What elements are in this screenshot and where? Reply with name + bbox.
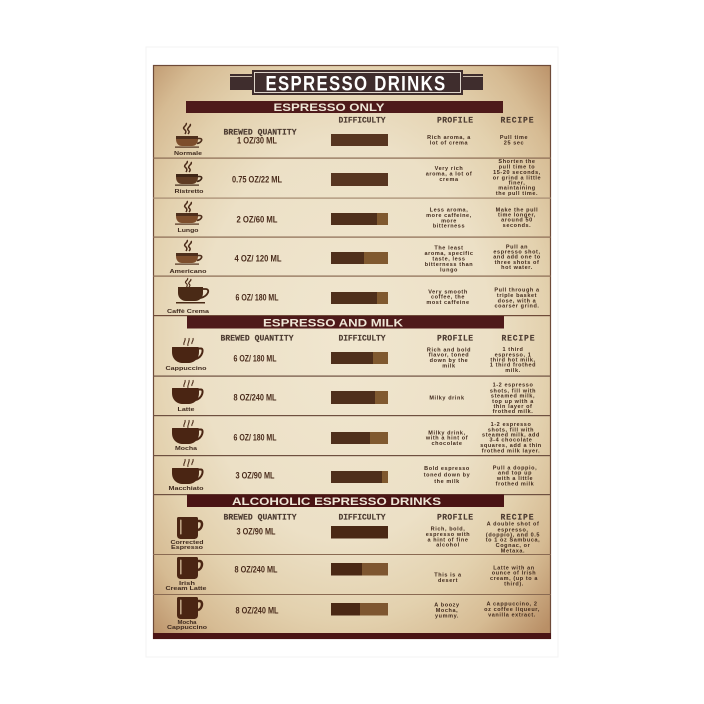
row: Corrected Espresso: Metaxa. (501, 548, 525, 554)
row: Mocha: shots, fill with (488, 427, 534, 433)
row: Americano: 4 OZ/ 120 ML (234, 254, 282, 264)
icon: cup (176, 278, 208, 304)
row: Lungo: around 50 (501, 218, 533, 224)
row: Caffè Crema (167, 278, 540, 315)
row: Normale: lot of crema (430, 140, 469, 146)
row: Ristretto: pull time to (499, 164, 535, 170)
row: Mocha Cappuccino: vanilla extract. (488, 612, 536, 618)
row: Mocha: Milky drink, (428, 430, 466, 436)
column headers (224, 116, 534, 138)
row: Macchiato: Pull a doppio, (493, 465, 537, 471)
outer card (146, 47, 558, 657)
row: Lungo: Less aroma, (430, 208, 468, 214)
row: Americano: and add one to (493, 255, 541, 261)
row: Cappuccino: down by the (430, 358, 468, 364)
row: Ristretto: Shorten the (498, 159, 536, 165)
row: Ristretto: 15-20 seconds, (493, 170, 541, 176)
row: Irish Cream Latte: This is a (434, 573, 462, 579)
row: Corrected Espresso: espresso with (426, 532, 470, 538)
row: Corrected Espresso: (doppio), and 0.5 (486, 532, 540, 538)
row: Caffè Crema: triple basket (497, 293, 537, 299)
section bar (187, 494, 504, 508)
row: Irish Cream Latte: cream, (up to a (490, 576, 538, 582)
title banner: ESPRESSO DRINKS (266, 73, 446, 96)
row: Ristretto: Very rich (435, 166, 463, 172)
row: Latte (172, 380, 536, 415)
icon: mug (177, 517, 202, 539)
row: Mocha Cappuccino: Cappuccino (167, 625, 208, 631)
row: Ristretto: crema (439, 177, 459, 183)
row: Irish Cream Latte: desert (438, 578, 458, 584)
row: Americano: lungo (440, 267, 458, 273)
icon: cup (175, 161, 202, 186)
row: Lungo: seconds. (503, 223, 531, 229)
row: Caffè Crema: Caffè Crema (167, 309, 209, 315)
row: Mocha (172, 420, 542, 454)
row: Lungo: more (441, 218, 457, 224)
section bar: ESPRESSO ONLY (274, 102, 385, 114)
row: Ristretto: Ristretto (174, 189, 205, 195)
icon: cup (175, 201, 202, 225)
row: Cappuccino: third hot milk, (490, 357, 536, 363)
column headers: BREWED QUANTITY (224, 128, 297, 138)
row: Latte: shots, fill with (490, 388, 536, 394)
row: Macchiato: frothed milk (496, 481, 535, 487)
row: Americano: aroma, specific (424, 251, 474, 257)
column headers: RECIPE (500, 116, 534, 126)
row: Macchiato: Bold espresso (424, 466, 470, 472)
row: Mocha Cappuccino: A cappuccino, 2 (487, 602, 537, 608)
row: Latte: Milky drink (429, 396, 465, 402)
icon: cup (172, 380, 203, 404)
icon: mug (177, 557, 202, 579)
row: Irish Cream Latte: third). (504, 581, 524, 587)
row: Americano: espresso shot, (493, 250, 541, 256)
column headers: PROFILE (437, 514, 473, 522)
row: Ristretto: finer, (509, 180, 525, 186)
column headers (220, 334, 535, 344)
row: Caffè Crema: coarser grind. (494, 304, 540, 310)
row: Lungo: more caffeine, (426, 213, 472, 219)
row: Cappuccino: 1 third frothed (490, 363, 536, 369)
row: Macchiato: 3 OZ/90 ML (236, 470, 275, 480)
row: Americano: bitterness than (425, 262, 473, 268)
row: Corrected Espresso: a hint of fine (427, 537, 469, 543)
row: Cappuccino: Cappuccino (166, 366, 208, 372)
row: Americano (170, 240, 541, 275)
row: Mocha Cappuccino: Mocha, (436, 608, 458, 614)
row: Mocha: 1-2 espresso (491, 422, 531, 428)
row: Corrected Espresso: Rich, bold, (431, 527, 465, 533)
icon: mug (177, 597, 202, 619)
row: Mocha: squares, add a thin (480, 443, 542, 449)
row: Corrected Espresso: Espresso (171, 545, 204, 551)
row: Caffè Crema: coffee, the (431, 295, 465, 301)
row: Lungo: bitterness (433, 224, 465, 230)
row: Corrected Espresso: espresso, (497, 527, 529, 533)
row: Mocha Cappuccino: 8 OZ/240 ML (236, 606, 279, 616)
row: Caffè Crema: Very smooth (428, 289, 468, 295)
row: Lungo: 2 OZ/60 ML (236, 214, 278, 224)
section bar (186, 101, 503, 114)
row: Cappuccino (166, 338, 536, 374)
row: Caffè Crema: most caffeine (426, 300, 470, 306)
section bar (187, 316, 504, 330)
row: Corrected Espresso (170, 517, 540, 554)
row: Irish Cream Latte: Latte with an (493, 565, 535, 571)
row: Latte: 8 OZ/240 ML (234, 392, 277, 402)
row: Caffè Crema: Pull through a (494, 288, 540, 294)
row: Normale: Rich aroma, a (427, 135, 471, 141)
row: Lungo: Lungo (178, 228, 199, 234)
row: Mocha: steamed milk, add (482, 432, 540, 438)
row: Caffè Crema: dose, with a (498, 298, 537, 304)
row: Mocha Cappuccino: oz coffee liqueur, (484, 607, 540, 613)
row: Macchiato: with a little (496, 476, 533, 482)
row: Macchiato: the milk (434, 479, 460, 485)
row: Latte: top up with a (492, 399, 534, 405)
row: Mocha Cappuccino (167, 597, 540, 631)
row: Latte: 1-2 espresso (493, 382, 533, 388)
row: Ristretto: or grind a little (493, 175, 541, 181)
row: Macchiato: toned down by (424, 473, 471, 479)
row: Macchiato (168, 459, 537, 492)
row: Mocha Cappuccino: yummy. (435, 613, 459, 619)
bottom bar (153, 633, 551, 639)
row: Cappuccino: 1 third (502, 347, 524, 353)
row: Lungo (175, 201, 538, 234)
row: Ristretto: aroma, a lot of (426, 172, 472, 178)
icon: cup (172, 459, 203, 484)
row: Cappuccino: Rich and bold (427, 347, 471, 353)
row: Irish Cream Latte: 8 OZ/240 ML (234, 564, 278, 574)
column headers: DIFFICULTY (338, 116, 386, 126)
column headers (224, 514, 534, 522)
row: Americano: The least (434, 246, 464, 252)
row: Mocha Cappuccino: Mocha (178, 620, 197, 626)
section: alcoholic espresso drinks (153, 494, 551, 631)
row: Cappuccino: milk. (505, 368, 521, 374)
column headers: DIFFICULTY (338, 514, 386, 522)
icon: cup (175, 240, 202, 265)
section: espresso and milk (153, 316, 551, 492)
row: Ristretto (174, 159, 541, 197)
icon: cup (175, 123, 202, 148)
section: espresso only (153, 101, 551, 315)
row: Cappuccino: milk (442, 363, 456, 369)
icon: cup (172, 420, 203, 444)
row: Macchiato: Macchiato (168, 486, 205, 492)
column headers: BREWED QUANTITY (224, 514, 297, 522)
row: Corrected Espresso: A double shot of (487, 522, 539, 528)
row: Latte: frothed milk. (493, 409, 533, 415)
column headers: BREWED QUANTITY (220, 334, 294, 344)
column headers: RECIPE (500, 514, 534, 522)
row: Ristretto: 0.75 OZ/22 ML (232, 174, 283, 184)
row: Irish Cream Latte: Irish (179, 581, 195, 587)
row: Cappuccino: 6 OZ/ 180 ML (234, 354, 277, 364)
row: Cappuccino: espresso, 1 (495, 352, 531, 358)
panel: poster background (154, 66, 550, 638)
row: Mocha: with a hint of (425, 436, 468, 442)
row: Corrected Espresso: 3 OZ/90 ML (236, 526, 276, 536)
row: Americano: Americano (170, 269, 208, 275)
row: Corrected Espresso: to 1 oz Sambuca, (486, 538, 540, 544)
section bar: ESPRESSO AND MILK (263, 318, 403, 330)
row: Irish Cream Latte: Cream Latte (166, 586, 207, 592)
row: Americano: hot water. (501, 265, 533, 271)
row: Lungo: Make the pull (496, 207, 538, 213)
row: Corrected Espresso: Corrected (170, 540, 204, 546)
title banner (230, 70, 483, 96)
row: Cappuccino: flavor, toned (429, 353, 469, 359)
row: Latte: steamed milk, (491, 394, 535, 400)
row: Mocha Cappuccino: A boozy (434, 603, 460, 609)
row: Mocha: 6 OZ/ 180 ML (234, 432, 277, 442)
column headers: DIFFICULTY (338, 334, 386, 344)
row: Mocha: 3-4 chocolate (490, 438, 532, 444)
row: Irish Cream Latte: ounce of Irish (492, 571, 536, 577)
row: Americano: Pull an (506, 244, 528, 250)
row: Americano: three shots of (495, 260, 539, 266)
row: Ristretto: the pull time. (496, 191, 538, 197)
row: Irish Cream Latte (166, 557, 538, 592)
row: Mocha: chocolate (431, 441, 463, 447)
section bar: ALCOHOLIC ESPRESSO DRINKS (232, 496, 441, 508)
row: Normale: Pull time (500, 135, 528, 141)
row: Corrected Espresso: Cognac, or (496, 543, 531, 549)
row: Normale (174, 123, 528, 157)
row: Mocha: Mocha (175, 446, 197, 452)
row: Macchiato: and top up (498, 470, 532, 476)
row: Latte: thin layer of (494, 404, 532, 410)
row: Corrected Espresso: alcohol (436, 543, 460, 549)
row: Normale: 1 OZ/30 ML (237, 136, 278, 146)
row: Mocha: frothed milk layer. (482, 448, 540, 454)
row: Lungo: time longer, (498, 213, 536, 219)
row: Latte: Latte (178, 407, 195, 413)
row: Caffè Crema: 6 OZ/ 180 ML (236, 292, 279, 302)
icon: cup (172, 338, 203, 363)
column headers: RECIPE (502, 334, 535, 344)
row: Americano: taste, less (432, 256, 466, 262)
column headers: PROFILE (437, 334, 473, 344)
row: Ristretto: maintaining (498, 186, 536, 192)
row: Normale: 25 sec (504, 140, 524, 146)
column headers: PROFILE (437, 116, 473, 126)
row: Normale: Normale (174, 151, 202, 157)
